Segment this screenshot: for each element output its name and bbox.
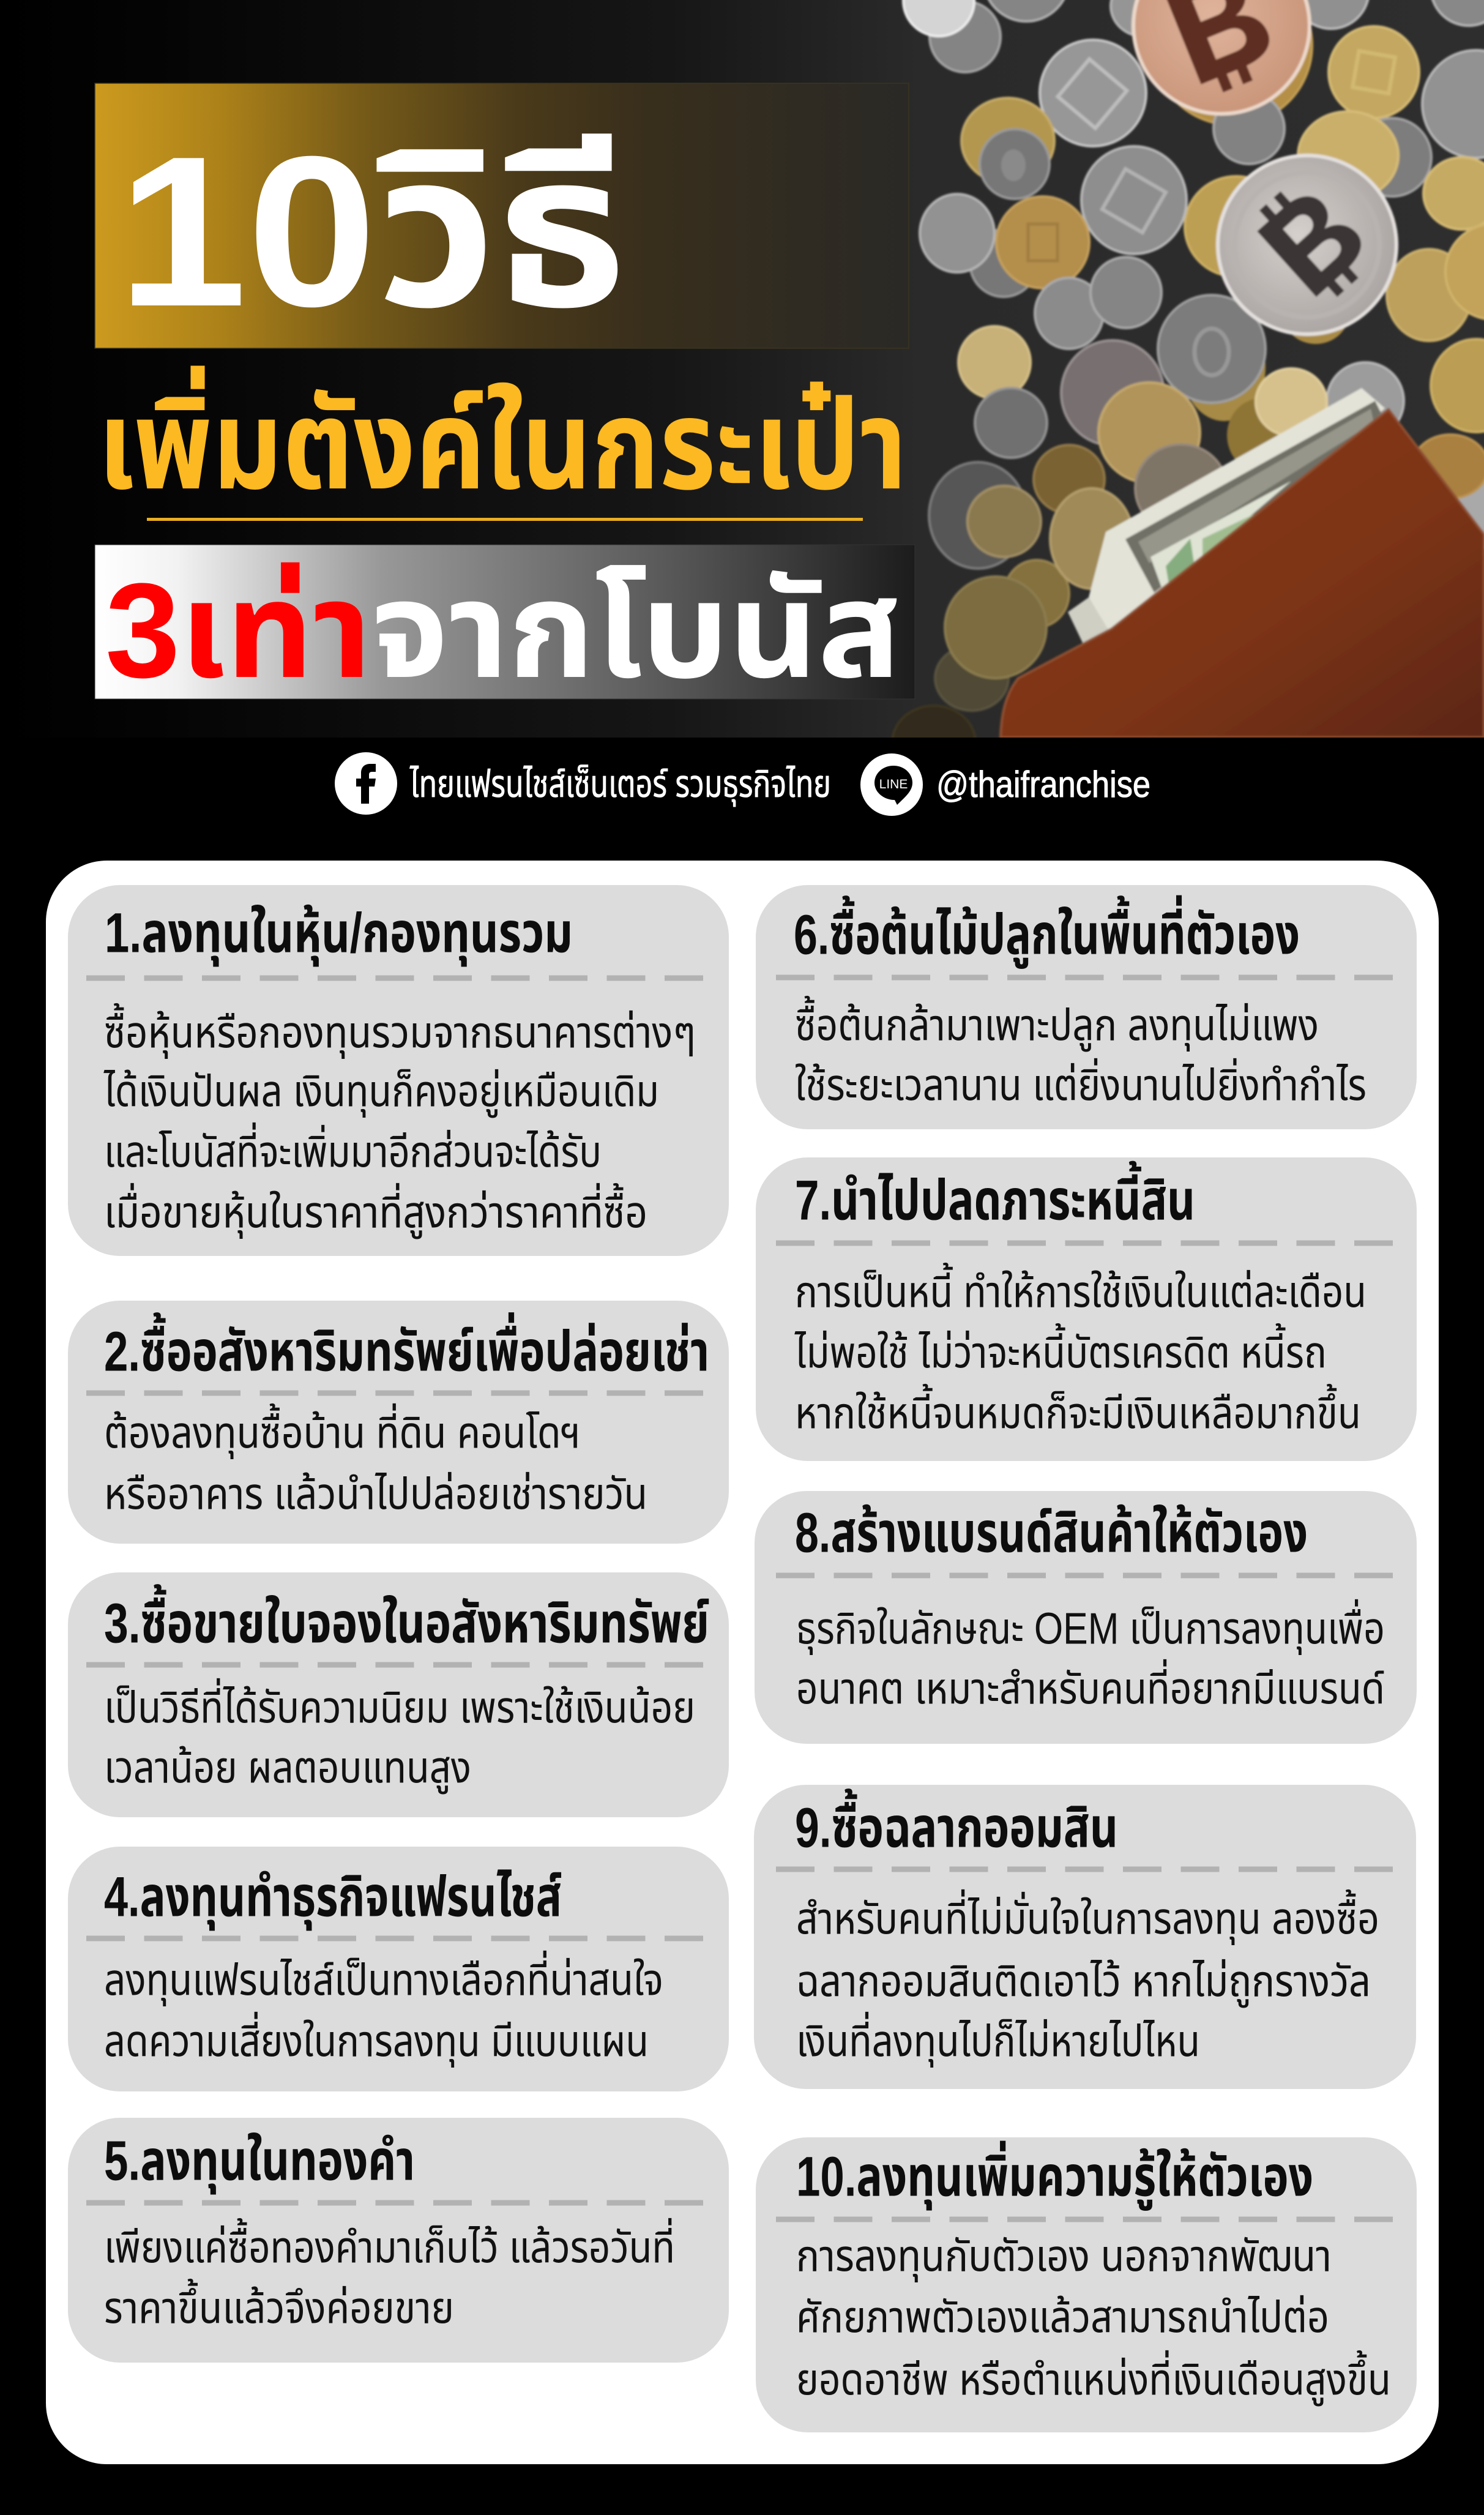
body 4: ลงทุนแฟรนไชส์เป็นทางเลือกที่น่าสนใจ	[104, 1950, 663, 2006]
card 5	[68, 2118, 729, 2363]
body 10	[796, 2232, 1391, 2407]
card 7	[756, 1157, 1417, 1461]
heading 10: 10.ลงทุนเพิ่มความรู้ให้ตัวเอง	[796, 2140, 1313, 2211]
body 2	[104, 1403, 647, 1519]
title box: 10 วิธี: 10วิธี	[117, 112, 627, 351]
heading 7: 7.นำไปปลดภาระหนี้สิน	[795, 1160, 1195, 1231]
coins: scattered background coins	[892, 0, 1484, 779]
heading 6: 6.ซื้อต้นไม้ปลูกในพื้นที่ตัวเอง	[794, 895, 1300, 970]
heading 9: 9.ซื้อฉลากออมสิน	[795, 1788, 1118, 1859]
coin: copper bitcoin	[1133, 0, 1310, 114]
banknotes	[1068, 388, 1385, 644]
body 9: สำหรับคนที่ไม่มั่นใจในการลงทุน ลองซื้อ	[796, 1889, 1379, 1945]
coin: silver bitcoin	[1218, 155, 1396, 334]
social bar	[335, 752, 1150, 816]
icon: line: LINE	[879, 777, 908, 791]
icon: line	[860, 753, 923, 816]
body 8: ธุรกิจในลักษณะ OEM เป็นการลงทุนเพื่อ	[796, 1599, 1385, 1655]
body 4	[104, 1950, 663, 2068]
body 7: ไม่พอใช้ ไม่ว่าจะหนี้บัตรเครดิต หนี้รถ	[794, 1323, 1327, 1377]
body 10: ยอดอาชีพ หรือตำแหน่งที่เงินเดือนสูงขึ้น	[796, 2350, 1391, 2407]
body 4: ลดความเสี่ยงในการลงทุน มีแบบแผน	[104, 2011, 649, 2068]
line account: @thaifranchise	[936, 764, 1150, 805]
title box: 3 เท่า จากโบนัส	[95, 545, 915, 706]
icon: facebook	[335, 752, 397, 815]
card 9	[754, 1785, 1416, 2089]
highlight: 3เท่า: 3เท่า	[105, 555, 371, 706]
facebook page name: ไทยแฟรนไชส์เซ็นเตอร์ รวมธุรกิจไทย	[409, 763, 831, 807]
header background	[0, 0, 1484, 738]
wallet	[1001, 409, 1484, 738]
panel: white content panel	[46, 861, 1439, 2464]
body 10: การลงทุนกับตัวเอง นอกจากพัฒนา	[796, 2232, 1332, 2283]
body 7: การเป็นหนี้ ทำให้การใช้เงินในแต่ละเดือน	[795, 1262, 1367, 1317]
body 1	[103, 1003, 696, 1239]
body 1: ได้เงินปันผล เงินทุนก็คงอยู่เหมือนเดิม	[103, 1067, 659, 1118]
body 5: เพียงแค่ซื้อทองคำมาเก็บไว้ แล้วรอวันที่	[104, 2218, 675, 2272]
body 1: และโบนัสที่จะเพิ่มมาอีกส่วนจะได้รับ	[104, 1123, 602, 1176]
body 8: อนาคต เหมาะสำหรับคนที่อยากมีแบรนด์	[796, 1659, 1385, 1714]
body 5	[104, 2218, 675, 2333]
body 6: ใช้ระยะเวลานาน แต่ยิ่งนานไปยิ่งทำกำไร	[795, 1058, 1367, 1110]
body 3: เป็นวิธีที่ได้รับความนิยม เพราะใช้เงินน้อย	[104, 1678, 695, 1732]
body 2: ต้องลงทุนซื้อบ้าน ที่ดิน คอนโดฯ	[104, 1403, 581, 1459]
photo: coins and wallet	[892, 0, 1484, 779]
body 5: ราคาขึ้นแล้วจึงค่อยขาย	[104, 2278, 454, 2333]
body 7: หากใช้หนี้จนหมดก็จะมีเงินเหลือมากขึ้น	[795, 1383, 1361, 1438]
heading 1: 1.ลงทุนในหุ้น/กองทุนรวม	[105, 902, 573, 967]
body 3	[104, 1678, 695, 1795]
subtitle: เพิ่มตังค์ในกระเป๋า: เพิ่มตังค์ในกระเป๋า	[98, 365, 907, 515]
body 2: หรืออาคาร แล้วนำไปปล่อยเช่ารายวัน	[104, 1470, 647, 1519]
body 9	[796, 1889, 1379, 2068]
body 1: ซื้อหุ้นหรือกองทุนรวมจากธนาคารต่างๆ	[104, 1003, 696, 1059]
heading 2: 2.ซื้ออสังหาริมทรัพย์เพื่อปล่อยเช่า	[104, 1312, 709, 1383]
card 4	[68, 1847, 729, 2091]
card 2	[68, 1301, 729, 1544]
body 9: ฉลากออมสินติดเอาไว้ หากไม่ถูกรางวัล	[796, 1957, 1371, 2008]
text: จากโบนัส: จากโบนัส	[371, 555, 901, 706]
body 8	[796, 1599, 1385, 1714]
heading 3: 3.ซื้อขายใบจองในอสังหาริมทรัพย์	[104, 1584, 709, 1655]
body 9: เงินที่ลงทุนไปก็ไม่หายไปไหน	[796, 2011, 1200, 2068]
body 3: เวลาน้อย ผลตอบแทนสูง	[104, 1743, 471, 1795]
body 6: ซื้อต้นกล้ามาเพาะปลูก ลงทุนไม่แพง	[795, 995, 1319, 1052]
title box: 10 วิธี	[95, 83, 909, 351]
card 3	[68, 1572, 729, 1817]
body 6	[795, 995, 1367, 1110]
heading 5: 5.ลงทุนในทองคำ	[104, 2130, 415, 2195]
body 10: ศักยภาพตัวเองแล้วสามารถนำไปต่อ	[796, 2293, 1329, 2342]
heading 8: 8.สร้างแบรนด์สินค้าให้ตัวเอง	[795, 1502, 1308, 1564]
heading 4: 4.ลงทุนทำธุรกิจแฟรนไชส์	[104, 1866, 562, 1930]
card 8	[755, 1491, 1417, 1744]
body 1: เมื่อขายหุ้นในราคาที่สูงกว่าราคาที่ซื้อ	[104, 1183, 647, 1239]
card 1	[68, 885, 729, 1256]
body 7	[794, 1262, 1367, 1438]
card 6	[756, 885, 1417, 1129]
card 10	[756, 2137, 1417, 2432]
